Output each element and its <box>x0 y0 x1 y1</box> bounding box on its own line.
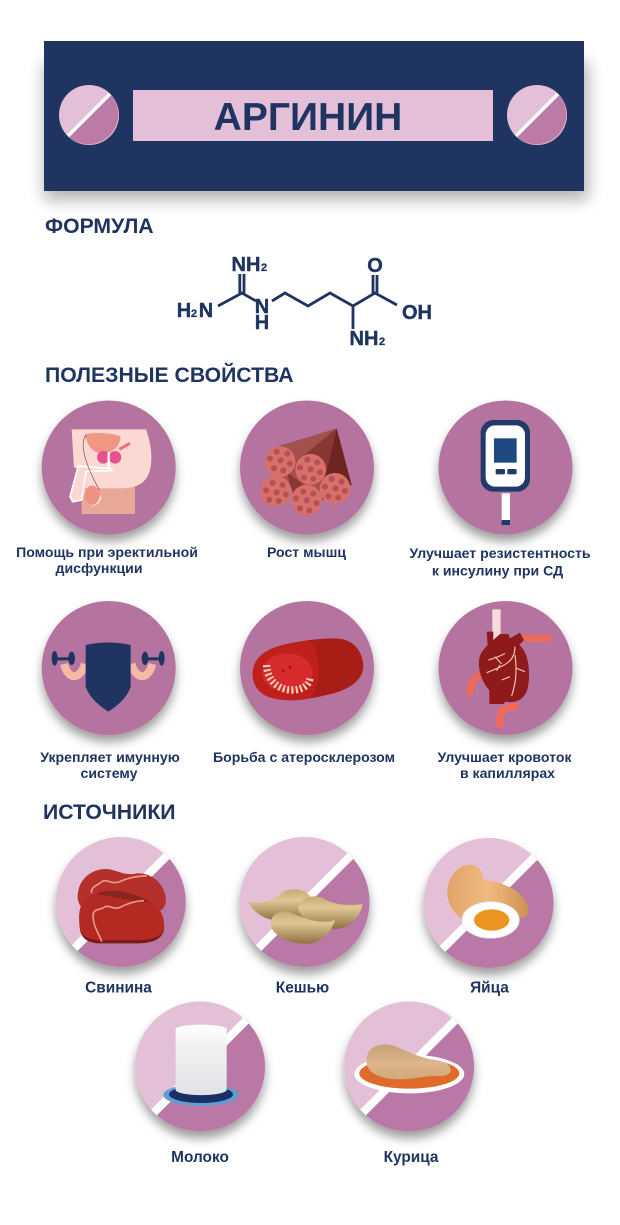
icon: muscle bundle <box>260 428 352 515</box>
circle <box>240 400 374 534</box>
icon: chicken leg on plate <box>354 1044 464 1093</box>
title bar <box>133 90 493 141</box>
icon: anatomy <box>70 429 151 514</box>
panel: pork <box>56 837 186 996</box>
panel: muscle growth <box>240 400 374 560</box>
icon: right pill <box>507 85 567 145</box>
circle <box>424 838 554 968</box>
circle <box>438 601 572 735</box>
icon: glucometer <box>481 420 530 525</box>
panel: atherosclerosis <box>213 601 395 765</box>
atom labels: H <box>177 300 191 322</box>
label: к инсулину при СД <box>432 562 563 578</box>
atom labels: 2 <box>191 308 197 320</box>
icon: eggs <box>447 865 528 938</box>
atom labels: NH <box>232 254 260 276</box>
panel: erectile dysfunction <box>16 400 198 576</box>
panel: milk <box>135 1002 265 1166</box>
label: Помощь при эректильной <box>16 544 198 560</box>
circle <box>240 601 374 735</box>
atom labels: N <box>199 300 213 322</box>
heading: useful properties: ПОЛЕЗНЫЕ СВОЙСТВА <box>45 362 294 387</box>
label: Улучшает резистентность <box>409 545 591 561</box>
heading: formula: ФОРМУЛА <box>45 215 154 238</box>
icon: shield with dumbbells <box>52 642 165 712</box>
atom labels: O <box>367 255 383 277</box>
circle <box>56 837 186 967</box>
heading: sources: ИСТОЧНИКИ <box>43 801 175 824</box>
panel: capillary blood flow <box>437 601 572 781</box>
panel: immune system <box>40 601 180 781</box>
label: в капиллярах <box>460 765 555 781</box>
panel: insulin resistance <box>409 400 591 578</box>
banner panel <box>44 41 584 191</box>
label: Яйца <box>470 980 509 996</box>
atom labels: H <box>255 312 269 334</box>
circle <box>240 837 370 967</box>
icon: glass of milk <box>163 1025 239 1106</box>
atom labels: N <box>255 296 269 318</box>
banner shadow <box>44 62 588 200</box>
panel: cashew <box>240 837 370 996</box>
atom labels <box>177 254 432 350</box>
atom labels: OH <box>402 302 432 324</box>
circle <box>42 400 176 534</box>
label: Курица <box>384 1149 439 1166</box>
bonds <box>218 274 397 329</box>
atom labels: NH <box>350 328 378 350</box>
label: Улучшает кровоток <box>437 749 572 765</box>
atom labels: 2 <box>379 336 385 348</box>
icon: cashews <box>248 889 363 944</box>
label: Свинина <box>85 980 152 996</box>
label: дисфункции <box>56 560 142 576</box>
label: Борьба с атеросклерозом <box>213 749 395 765</box>
label: Кешью <box>276 980 329 996</box>
circle <box>438 400 572 534</box>
label: Укрепляет имунную <box>40 749 180 765</box>
panel: eggs <box>424 838 554 996</box>
icon: pork steaks <box>78 869 166 943</box>
icon: heart <box>470 609 552 727</box>
banner <box>44 41 588 200</box>
circle <box>344 1002 474 1132</box>
label: Молоко <box>171 1149 229 1166</box>
label: Рост мышц <box>267 544 346 560</box>
circle <box>42 601 176 735</box>
title: АРГИНИН <box>214 96 402 139</box>
atom labels: 2 <box>261 262 267 274</box>
icon: left pill <box>59 85 119 145</box>
icon: artery <box>253 638 363 700</box>
panel: chicken <box>344 1002 474 1166</box>
label: систему <box>81 765 138 781</box>
chart: arginine structural formula <box>177 254 432 350</box>
circle <box>135 1002 265 1132</box>
